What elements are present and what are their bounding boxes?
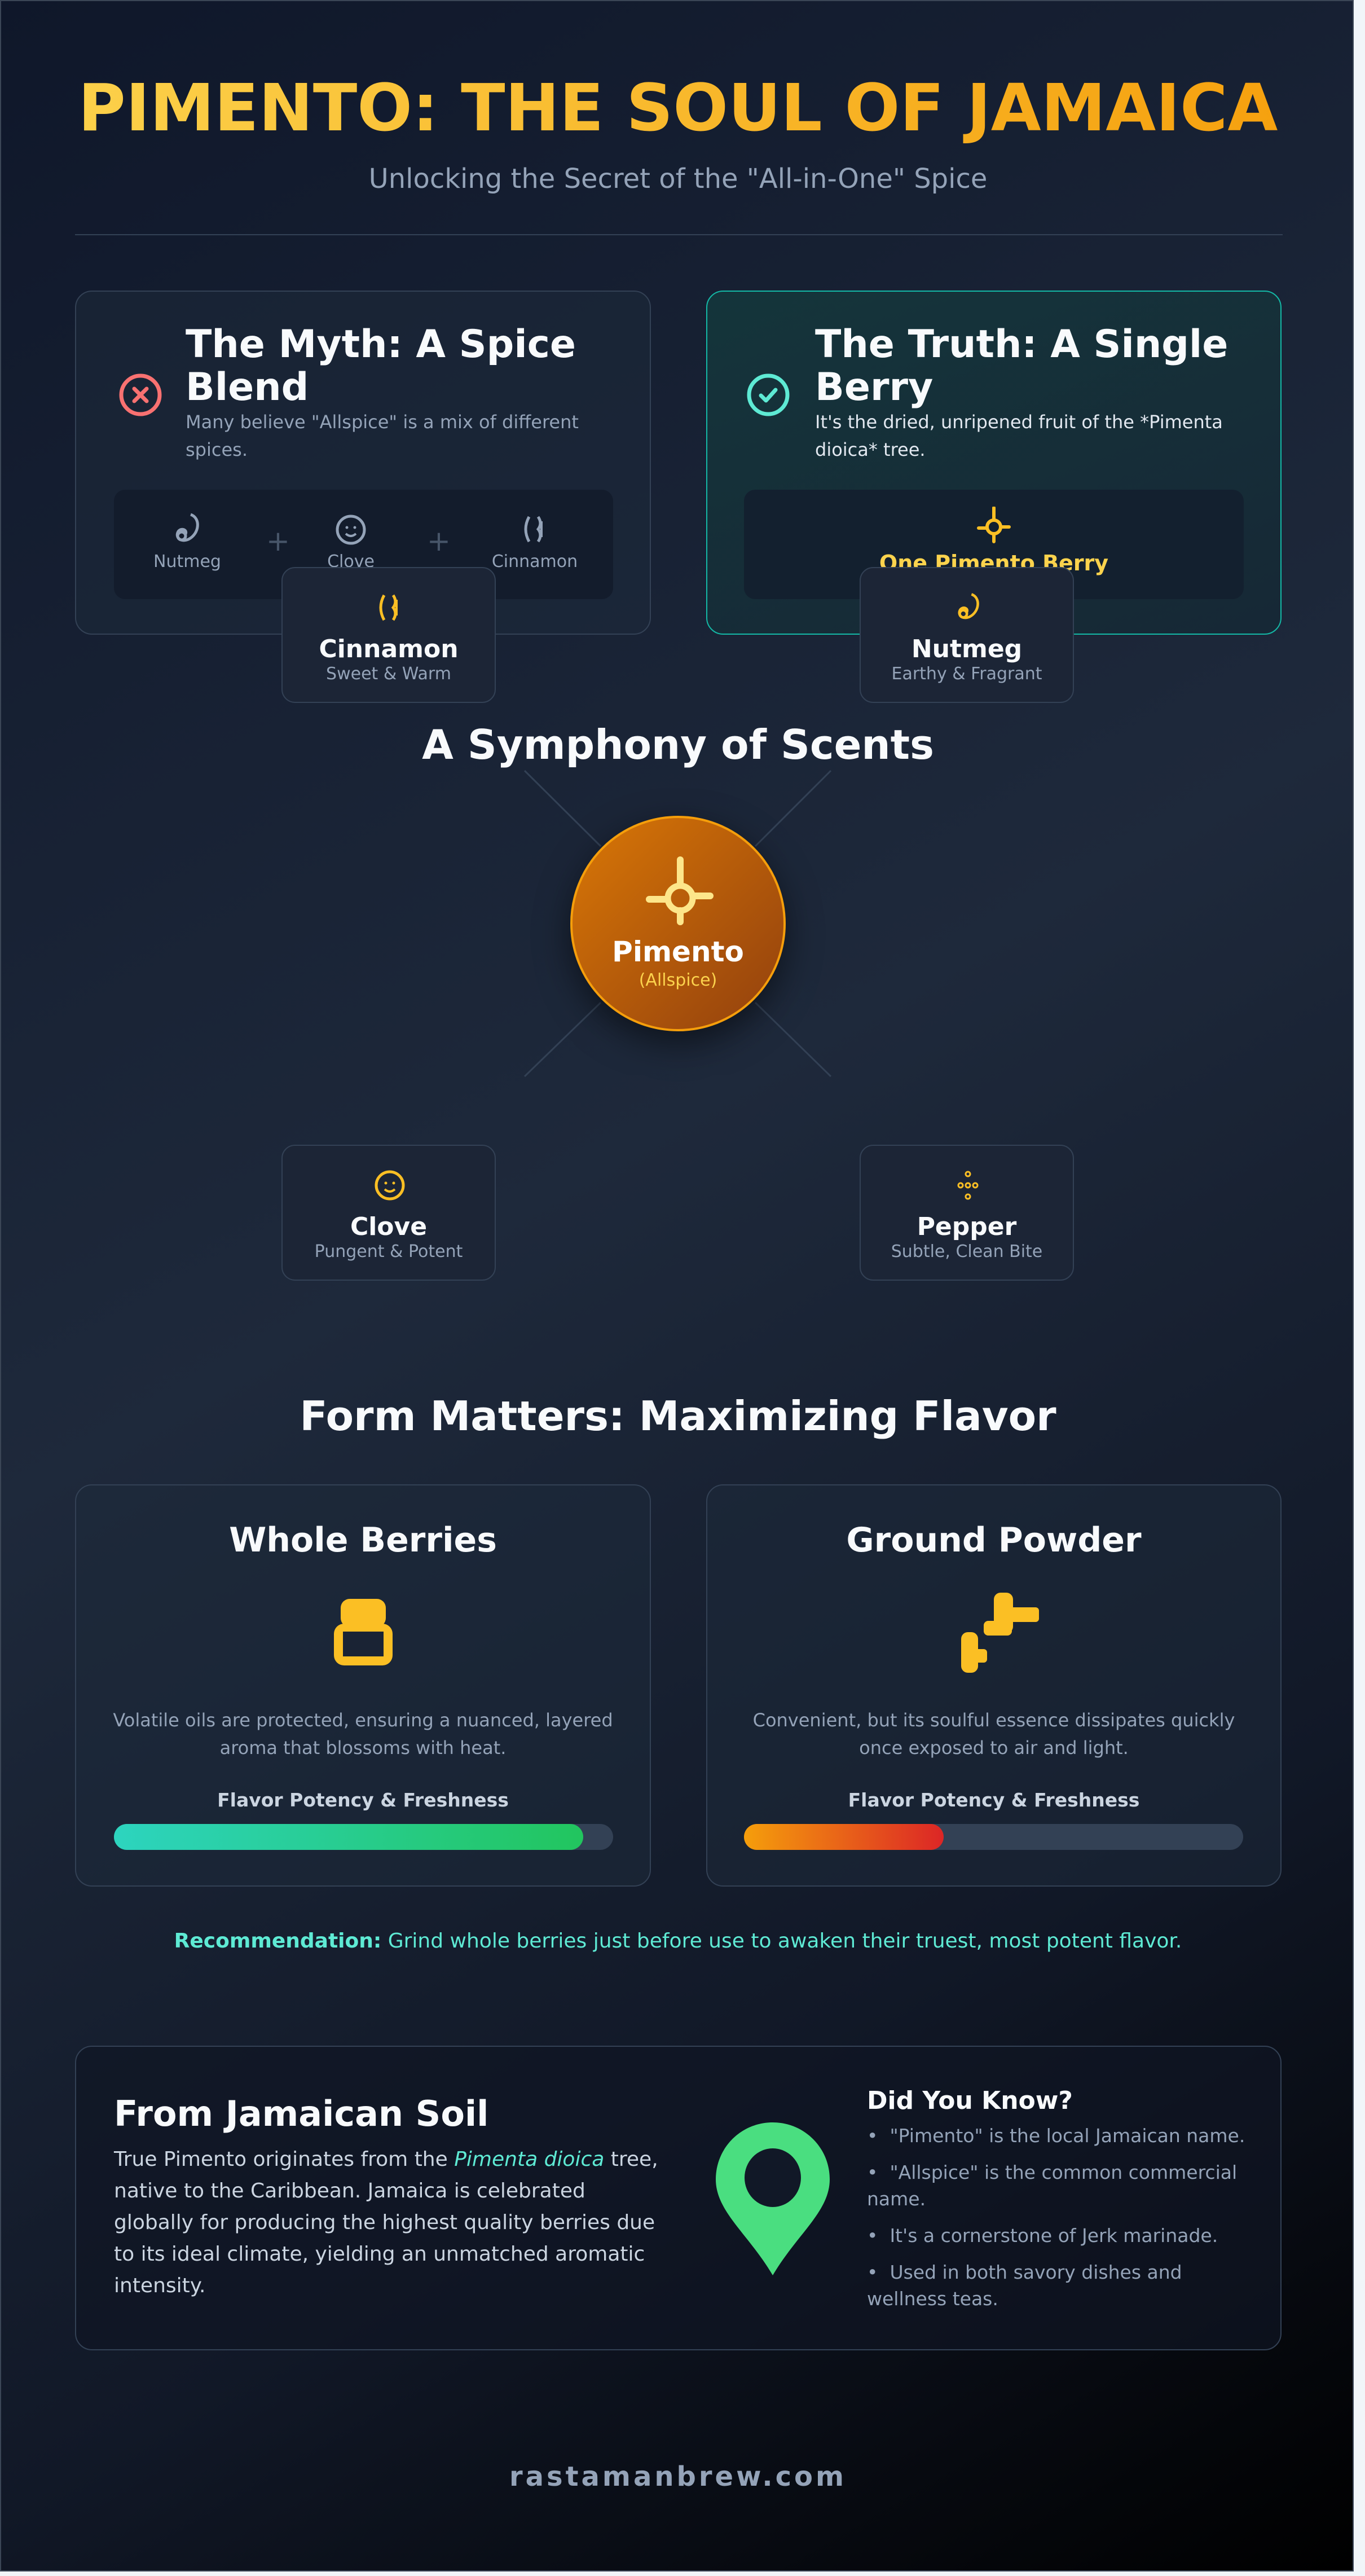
icon: clove [336,515,366,545]
spice mix box: + [427,525,451,557]
subtitle: Unlocking the Secret of the "All-in-One" Spice [369,163,987,195]
panel: ground powder: Ground Powder [846,1520,1142,1560]
panel: jamaican soil [75,2046,1282,2350]
title: PIMENTO: THE SOUL OF JAMAICA [78,71,1278,146]
spice mix box: Clove [327,552,375,572]
text: myth description: Many believe "Allspice" is a mix of different spices. [186,411,579,460]
text: truth description: It's the dried, unripened fruit of the *Pimenta dioica* tree. [815,411,1223,460]
heading: symphony: A Symphony of Scents [422,721,934,768]
spice mix box: Cinnamon [492,552,578,572]
text: ground description: Convenient, but its soulful essence dissipates quickly once exposed to air and light. [753,1709,1235,1759]
spice mix box: + [266,525,290,557]
central circle: pimento [570,816,786,1031]
central circle: pimento: Pimento [612,935,744,968]
text: whole berries description: Volatile oils are protected, ensuring a nuanced, layered aroma that blossoms with heat. [113,1709,613,1759]
scent card: nutmeg: Earthy & Fragrant [891,664,1042,684]
icon: x circle [120,373,161,416]
icon: jar [334,1599,393,1665]
scent card: nutmeg [860,567,1074,703]
spice mix box [114,490,613,599]
panel: myth [75,291,651,635]
scent card: pepper: Subtle, Clean Bite [891,1242,1042,1261]
did you know: • "Allspice" is the common commercial name. [867,2161,1237,2210]
did you know [867,2086,1245,2310]
panel: ground powder: Flavor Potency & Freshness [848,1789,1139,1811]
panel: jamaican soil: From Jamaican Soil [114,2093,488,2134]
did you know: Did You Know? [867,2086,1073,2115]
heading: truth: The Truth: A Single Berry [815,322,1228,410]
icon: map pin [716,2122,830,2275]
icon: check circle [747,373,790,416]
text: soil paragraph [114,2148,658,2297]
heading: myth: The Myth: A Spice Blend [186,322,576,410]
text: soil paragraph: native to the Caribbean. Jamaica is celebrated [114,2179,585,2203]
scent card: cinnamon: Sweet & Warm [326,664,451,684]
spice mix box: Nutmeg [153,552,221,572]
scent card: pepper [860,1145,1074,1281]
scent card: cinnamon [281,567,496,703]
scent card: cinnamon: Cinnamon [319,635,459,663]
panel: whole berries [75,1484,651,1887]
did you know: • Used in both savory dishes and wellness teas. [867,2261,1182,2310]
single berry box [744,490,1244,599]
scent card: clove: Clove [350,1212,427,1241]
recommendation: Recommendation: Grind whole berries just before use to awaken their truest, most potent flavor. [174,1929,1182,1953]
heading: form matters: Form Matters: Maximizing Flavor [300,1392,1056,1440]
panel: truth [706,291,1282,635]
scent card: clove [281,1145,496,1281]
panel: whole berries: Whole Berries [229,1520,497,1560]
icon: cinnamon [525,516,543,543]
text: soil paragraph: globally for producing the highest quality berries due [114,2211,655,2234]
text: soil paragraph: intensity. [114,2274,205,2297]
text: soil paragraph: True Pimento originates from the Pimenta dioica tree, [114,2148,658,2171]
panel: ground powder [706,1484,1282,1887]
bar: whole potency [114,1824,613,1850]
icon: powder [961,1593,1039,1673]
text: soil paragraph: to its ideal climate, yielding an unmatched aromatic [114,2243,645,2266]
footer: rastamanbrew.com [509,2461,847,2493]
scent card: pepper: Pepper [917,1212,1016,1241]
central circle: pimento: (Allspice) [639,970,717,990]
did you know: • It's a cornerstone of Jerk marinade. [867,2225,1218,2247]
did you know: • "Pimento" is the local Jamaican name. [867,2125,1245,2147]
scent card: nutmeg: Nutmeg [912,635,1022,663]
bar: ground potency [744,1824,1243,1850]
scent card: clove: Pungent & Potent [315,1242,463,1261]
icon: berry large [646,856,714,925]
single berry box: One Pimento Berry [879,551,1108,575]
icon: nutmeg [176,513,199,542]
panel: whole berries: Flavor Potency & Freshness [217,1789,509,1811]
connector lines [524,770,831,1077]
icon: berry [977,507,1011,543]
